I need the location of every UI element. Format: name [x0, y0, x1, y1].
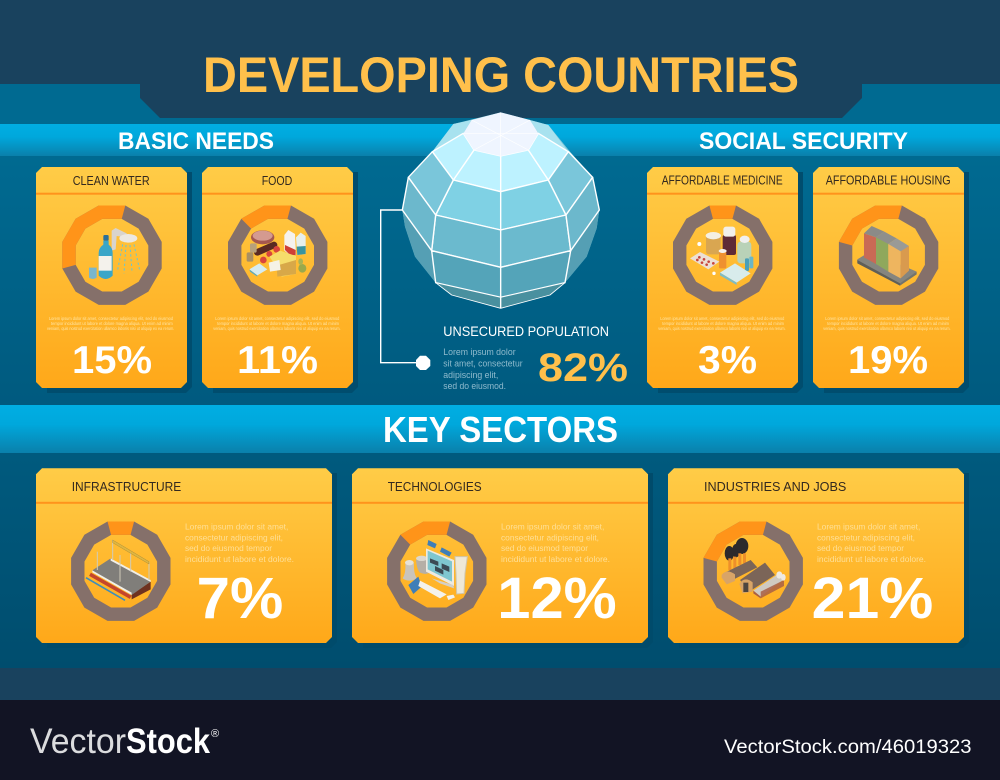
lorem text: tempor incididunt ut labore et dolore magna aliqua. Ut enim ad minim — [217, 321, 339, 326]
icon: factory with smoke — [722, 538, 786, 598]
value: 7% — [197, 566, 283, 631]
donut chart: technologies — [387, 522, 486, 621]
logo: VectorStock — [30, 722, 219, 761]
lorem text: consectetur adipiscing elit, — [817, 532, 915, 542]
lorem text: consectetur adipiscing elit, — [501, 532, 599, 542]
band: key sectors — [0, 405, 1000, 453]
chart: sphere of unsecured population — [402, 112, 599, 308]
value: 11% — [237, 339, 318, 382]
icon: computer and power plant — [403, 540, 467, 600]
lorem text: veniam, quis nostrud exercitation ullamco laboris nisi ut aliquip ex ea rerum. — [47, 326, 174, 331]
footer id: VectorStock.com/46019323 — [724, 737, 972, 758]
footer bar — [0, 700, 1000, 780]
lorem text: veniam, quis nostrud exercitation ullamco laboris nisi ut aliquip ex ea rerum. — [658, 326, 786, 331]
lorem text: consectetur adipiscing elit, — [185, 532, 283, 542]
card title: TECHNOLOGIES — [388, 480, 482, 494]
lorem text: Lorem ipsum dolor sit amet, consectetur adipiscing elit, sed do eiusmod — [215, 316, 340, 321]
callout heading: UNSECURED POPULATION — [443, 323, 609, 339]
lorem text: tempor incididunt ut labore et dolore magna aliqua. Ut enim ad minim — [827, 321, 949, 326]
callout text: adipiscing elit, — [443, 370, 498, 380]
donut chart: clean water — [62, 206, 162, 305]
lorem text: sed do eiusmod tempor — [817, 543, 904, 553]
lorem text — [658, 316, 786, 331]
title: DEVELOPING COUNTRIES — [203, 47, 799, 103]
logo: VectorStock: Stock — [126, 722, 210, 761]
icon: road and pipes — [86, 540, 151, 600]
lorem text — [213, 316, 341, 331]
card title: FOOD — [262, 174, 292, 188]
panel: affordable housing — [813, 167, 969, 393]
lorem text: incididunt ut labore et dolore. — [501, 554, 610, 564]
logo: VectorStock: Vector — [30, 722, 126, 761]
lorem text — [47, 316, 174, 331]
icon: bottle and shower — [89, 228, 140, 279]
lorem text: sed do eiusmod tempor — [501, 543, 588, 553]
panel: technologies — [352, 468, 653, 648]
heading: basic needs: BASIC NEEDS — [118, 128, 274, 155]
value: 15% — [72, 339, 152, 382]
connector line — [381, 210, 423, 363]
lorem text — [817, 522, 926, 564]
callout text — [443, 347, 523, 391]
callout text: sed do eiusmod. — [443, 381, 506, 391]
lorem text — [185, 522, 294, 564]
donut chart: affordable medicine — [673, 206, 772, 305]
card title: INDUSTRIES AND JOBS — [704, 480, 846, 494]
donut chart: affordable housing — [839, 206, 938, 305]
value: 12% — [497, 566, 617, 631]
callout text: sit amet, consectetur — [443, 358, 523, 368]
lorem text: tempor incididunt ut labore et dolore magna aliqua. Ut enim ad minim — [662, 321, 784, 326]
heading: social security: SOCIAL SECURITY — [699, 128, 908, 155]
card title: AFFORDABLE MEDICINE — [662, 174, 783, 188]
callout: unsecured population — [443, 323, 628, 391]
value: 3% — [698, 339, 757, 382]
lorem text: Lorem ipsum dolor sit amet, consectetur adipiscing elit, sed do eiusmod — [49, 316, 174, 321]
lorem text: Lorem ipsum dolor sit amet, consectetur adipiscing elit, sed do eiusmod — [660, 316, 785, 321]
heading: key sectors: KEY SECTORS — [383, 409, 618, 450]
lorem text — [501, 522, 610, 564]
lorem text — [823, 316, 951, 331]
icon: food items — [247, 230, 306, 277]
panel: clean water — [36, 167, 192, 393]
lorem text: Lorem ipsum dolor sit amet, — [817, 522, 920, 532]
donut chart: food — [228, 206, 327, 305]
panel: industries and jobs — [668, 468, 969, 648]
donut chart: industries and jobs — [704, 522, 803, 621]
callout text: Lorem ipsum dolor — [443, 347, 516, 357]
lorem text: incididunt ut labore et dolore. — [185, 554, 294, 564]
panel: affordable medicine — [647, 167, 803, 393]
connector dot — [416, 356, 430, 370]
lorem text: incididunt ut labore et dolore. — [817, 554, 926, 564]
band: basic needs and social security — [0, 124, 1000, 156]
lorem text: sed do eiusmod tempor — [185, 543, 272, 553]
logo: VectorStock: ® — [211, 728, 219, 740]
value: 21% — [812, 566, 933, 631]
icon: apartment buildings — [857, 226, 917, 286]
callout value: 82% — [538, 346, 628, 390]
lorem text: veniam, quis nostrud exercitation ullamco laboris nisi ut aliquip ex ea rerum. — [213, 326, 341, 331]
lorem text: veniam, quis nostrud exercitation ullamco laboris nisi ut aliquip ex ea rerum. — [823, 326, 951, 331]
card title: CLEAN WATER — [73, 174, 150, 188]
value: 19% — [848, 339, 928, 382]
title banner — [0, 0, 1000, 118]
panel: food — [202, 167, 358, 393]
lorem text: Lorem ipsum dolor sit amet, consectetur adipiscing elit, sed do eiusmod — [825, 316, 950, 321]
icon: medicine — [690, 227, 753, 285]
card title: AFFORDABLE HOUSING — [826, 174, 951, 188]
panel: infrastructure — [36, 468, 337, 648]
lorem text: Lorem ipsum dolor sit amet, — [185, 522, 288, 532]
lorem text: Lorem ipsum dolor sit amet, — [501, 522, 604, 532]
card title: INFRASTRUCTURE — [72, 480, 181, 494]
donut chart: infrastructure — [71, 522, 170, 621]
lorem text: tempor incididunt ut labore et dolore magna aliqua. Ut enim ad minim — [51, 321, 173, 326]
